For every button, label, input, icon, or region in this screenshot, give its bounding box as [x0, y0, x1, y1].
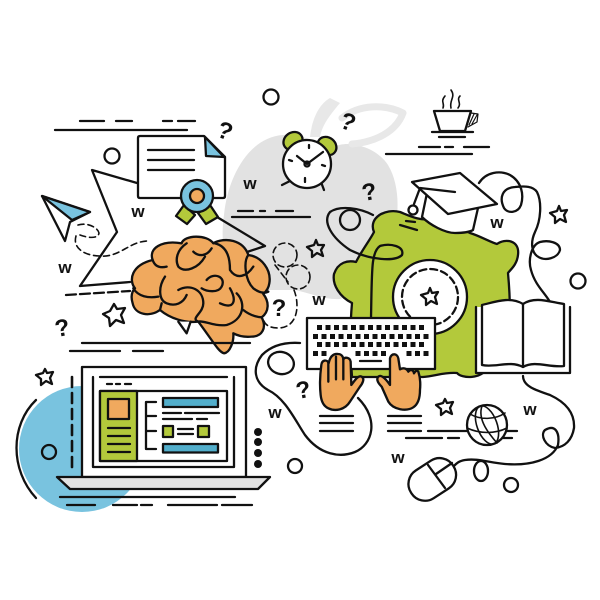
globe — [467, 403, 507, 447]
w labels: w — [311, 290, 326, 309]
medal — [181, 180, 213, 212]
laptop panel — [100, 391, 227, 461]
w labels: w — [522, 400, 537, 419]
medal ribbons — [176, 205, 218, 224]
dashed flight path — [75, 224, 310, 328]
decorative circles — [42, 90, 586, 492]
top left lines — [55, 121, 195, 130]
book — [476, 300, 570, 373]
squiggle keyboard left — [256, 343, 371, 455]
right hand — [377, 354, 420, 410]
question marks: ? — [360, 178, 379, 207]
question marks: ? — [272, 295, 286, 322]
brain — [132, 237, 270, 353]
coffee cup — [386, 90, 489, 154]
banner ribbon — [66, 170, 265, 295]
question marks: ? — [53, 314, 72, 343]
mouse — [402, 452, 462, 507]
lines under hands — [320, 416, 517, 438]
left hand — [320, 354, 363, 410]
w labels: w — [489, 213, 504, 232]
paper plane — [42, 196, 90, 241]
keyboard — [307, 318, 435, 369]
laptop — [57, 367, 270, 489]
laptop side marks — [16, 377, 252, 505]
lines under brain — [70, 343, 250, 351]
steam — [443, 90, 460, 108]
green gear — [334, 211, 518, 377]
graduation cap — [408, 173, 497, 233]
stars — [36, 206, 567, 415]
w labels: w — [130, 202, 145, 221]
keys — [313, 325, 428, 356]
question marks: ? — [213, 116, 236, 147]
w labels: w — [57, 258, 72, 277]
blue circle — [19, 386, 145, 512]
question marks — [53, 107, 379, 405]
squiggle gear left — [327, 208, 402, 318]
gray apple — [223, 98, 403, 299]
question marks: ? — [336, 107, 359, 138]
question marks: ? — [294, 376, 313, 405]
squiggle mouse cable — [452, 376, 574, 481]
gear inner circle — [393, 260, 467, 334]
w labels: w — [242, 174, 257, 193]
squiggle right — [479, 172, 560, 302]
w labels: w — [267, 403, 282, 422]
gray area lines — [232, 211, 310, 217]
certificate — [138, 136, 225, 224]
w labels — [57, 174, 537, 467]
w labels: w — [390, 448, 405, 467]
cup handle — [468, 113, 478, 127]
black dots — [254, 428, 262, 468]
alarm clock — [280, 128, 340, 190]
